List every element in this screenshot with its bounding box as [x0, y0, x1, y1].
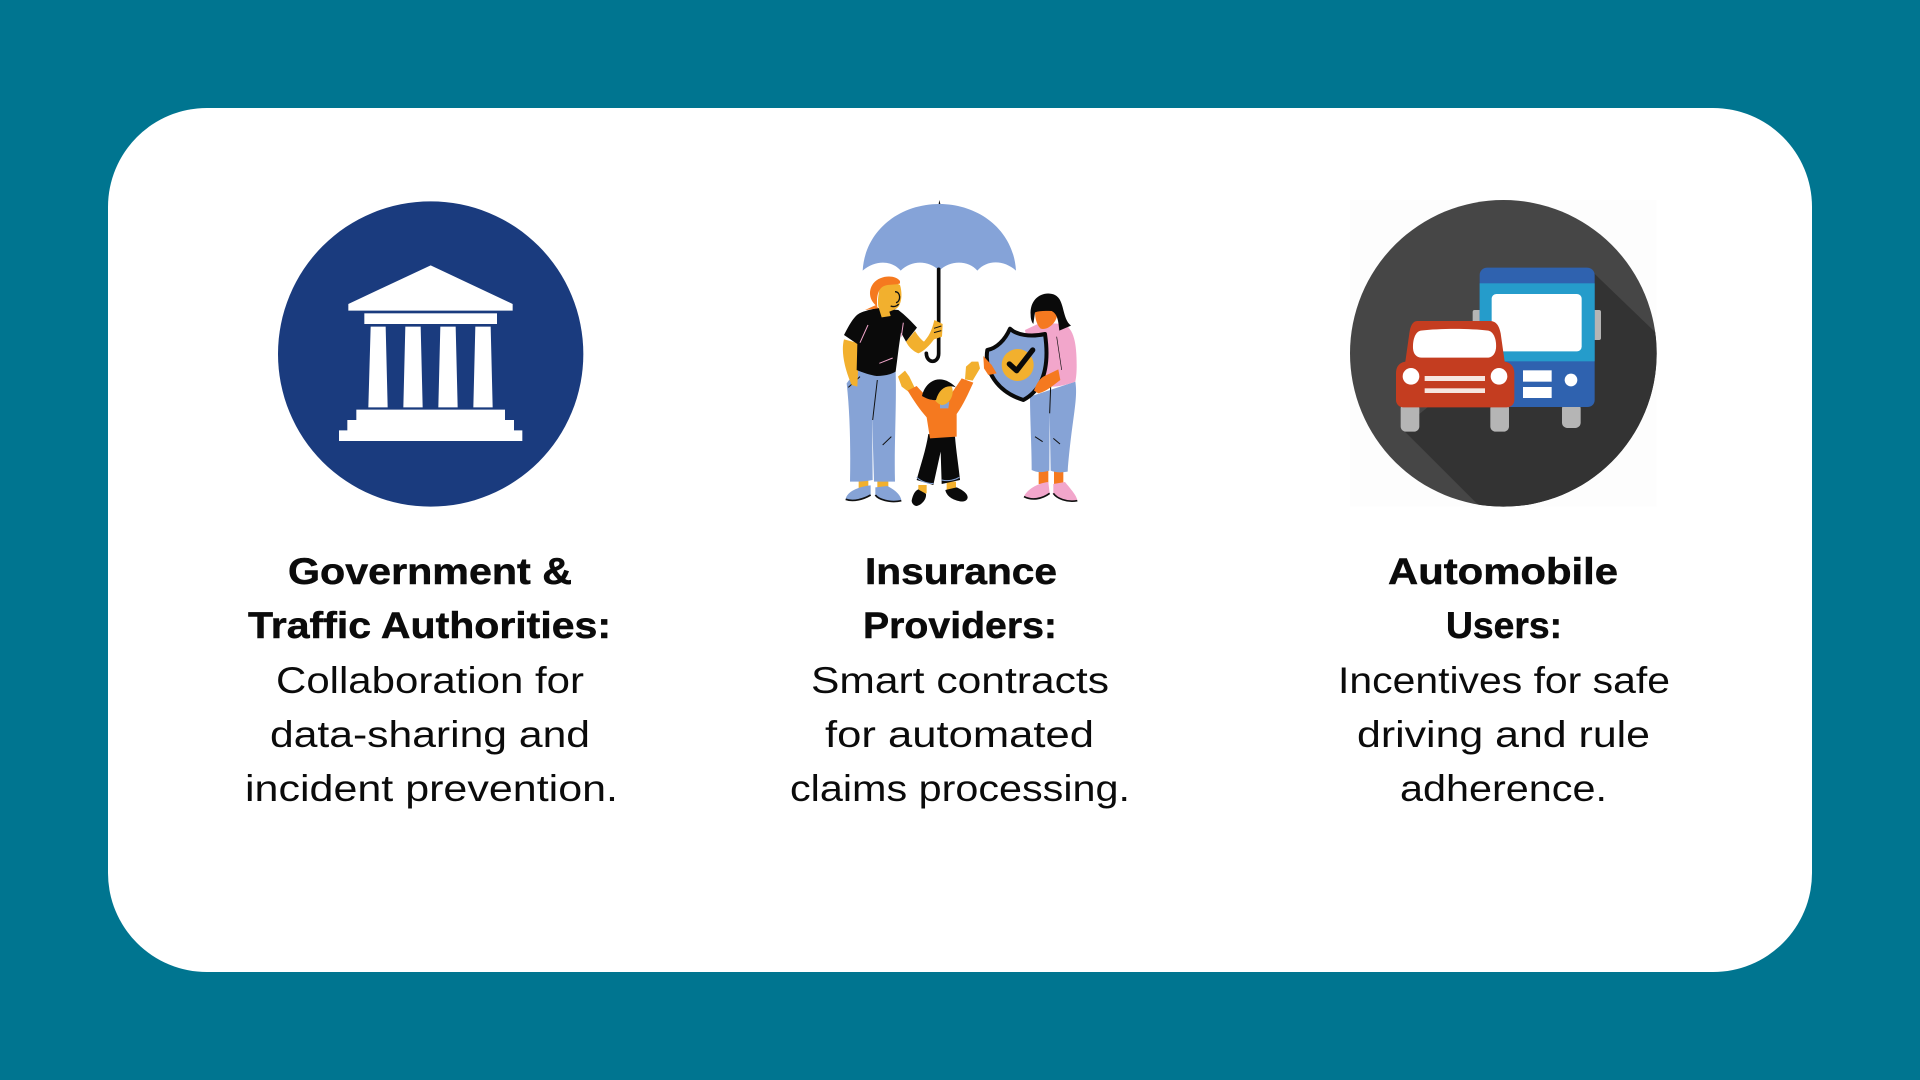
text: government and traffic authorities	[245, 551, 618, 809]
text: insurance providers: Providers:	[863, 605, 1057, 646]
text: insurance providers	[790, 551, 1130, 809]
text: insurance providers: Smart contracts	[811, 660, 1109, 701]
text: government and traffic authorities: Government &	[288, 551, 572, 592]
umbrella	[863, 200, 1016, 361]
adult with shield	[983, 294, 1077, 501]
text: government and traffic authorities: Traffic Authorities:	[248, 605, 611, 646]
car	[1396, 321, 1514, 432]
child	[898, 362, 980, 506]
icon: government building	[278, 201, 583, 507]
text: government and traffic authorities: incident prevention.	[245, 768, 618, 809]
bus	[1473, 268, 1601, 428]
text: automobile users: Users:	[1446, 605, 1562, 646]
panel: white card	[108, 108, 1812, 972]
text: automobile users	[1338, 551, 1670, 809]
text: insurance providers: claims processing.	[790, 768, 1130, 809]
text: automobile users: Automobile	[1388, 551, 1618, 592]
long shadow	[1402, 273, 1663, 513]
icon: family under umbrella with shield	[843, 200, 1077, 506]
text: automobile users: driving and rule	[1357, 714, 1650, 755]
text: government and traffic authorities: data-sharing and	[270, 714, 590, 755]
text: automobile users: adherence.	[1400, 768, 1607, 809]
text: automobile users: Incentives for safe	[1338, 660, 1670, 701]
adult with orange hair	[843, 276, 943, 502]
text: government and traffic authorities: Collaboration for	[276, 660, 584, 701]
text: insurance providers: for automated	[825, 714, 1094, 755]
text: insurance providers: Insurance	[865, 551, 1057, 592]
icon: car and bus	[1350, 200, 1663, 513]
